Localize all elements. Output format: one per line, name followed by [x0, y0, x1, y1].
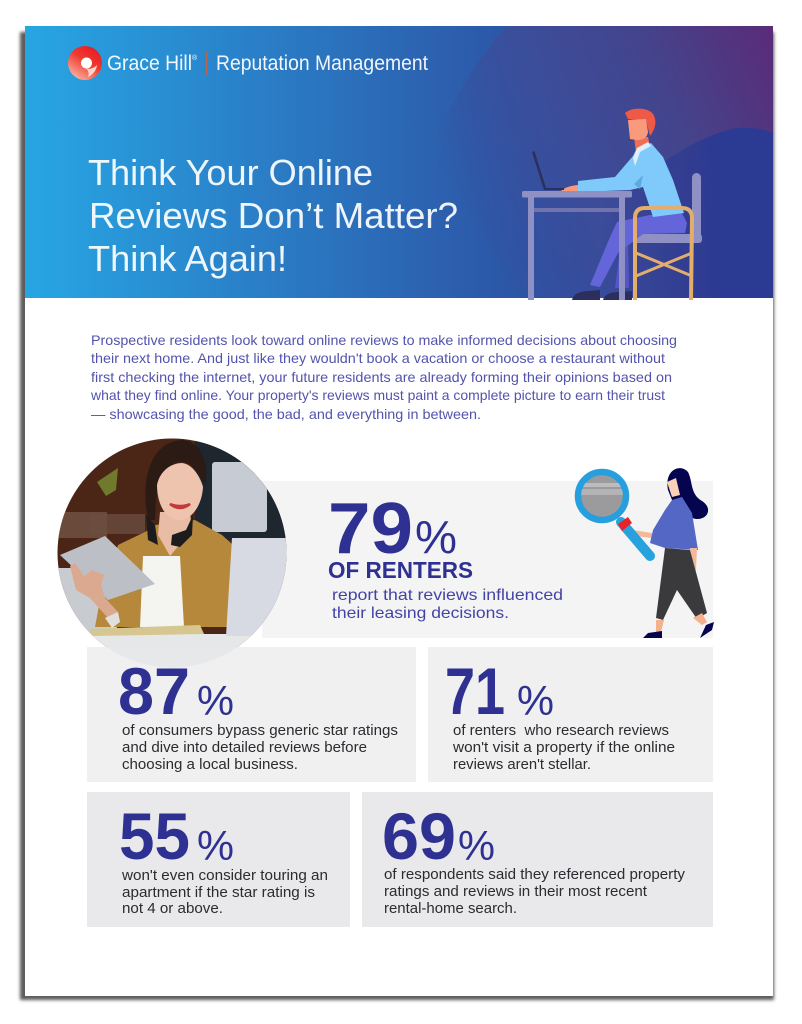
panel: 69%: %	[458, 822, 495, 869]
logo: Grace Hill	[107, 52, 192, 75]
stat: 79%	[328, 489, 473, 583]
intro paragraph: — showcasing the good, the bad, and everything in between.	[91, 407, 481, 422]
panel: 69%: rental-home search.	[384, 901, 517, 917]
intro paragraph	[90, 333, 677, 422]
panel: 55%: apartment if the star rating is	[122, 885, 315, 901]
title: Think Your Online	[88, 152, 373, 193]
stat: 79%: %	[415, 511, 457, 563]
panel: 71%: %	[517, 677, 554, 724]
title: Reviews Don’t Matter?	[89, 195, 458, 236]
stat: 79%: OF RENTERS	[328, 557, 473, 583]
logo	[68, 46, 428, 80]
logo: Reputation Management	[216, 52, 428, 75]
stat description	[332, 587, 563, 622]
panel: 55%: 55	[119, 799, 190, 873]
logo: ®	[192, 54, 198, 62]
panel: 87%	[87, 647, 416, 782]
panel: 69%	[362, 792, 713, 927]
panel: 87%: of consumers bypass generic star ratings	[122, 723, 398, 739]
panel: 87%: 87	[118, 654, 190, 728]
intro paragraph: first checking the internet, your future residents are already forming their opinions based on	[91, 370, 672, 385]
panel: 87%: %	[197, 677, 234, 724]
panel: 55%	[87, 792, 350, 927]
panel: 69%: 69	[382, 799, 456, 873]
panel: 55%: %	[197, 822, 234, 869]
panel: 71%: reviews aren't stellar.	[453, 757, 591, 773]
intro paragraph: their next home. And just like they wouldn't book a vacation or choose a restaurant without	[91, 351, 665, 366]
panel: 69%: ratings and reviews in their most recent	[384, 884, 647, 900]
title	[88, 152, 458, 279]
photo: woman with tablet	[58, 438, 286, 647]
panel: header banner	[25, 26, 773, 300]
intro paragraph: Prospective residents look toward online reviews to make informed decisions about choosing	[91, 333, 677, 348]
stat description: report that reviews influenced	[332, 587, 563, 604]
illustration: woman with magnifying glass	[578, 468, 714, 638]
intro paragraph: what they find online. Your property's reviews must paint a complete picture to earn their trust	[90, 388, 665, 403]
panel: 71%: of renters who research reviews	[453, 723, 669, 739]
panel: 55%: won't even consider touring an	[121, 868, 328, 884]
panel: 87%: and dive into detailed reviews before	[122, 740, 367, 756]
stat: 79%: 79	[328, 489, 413, 569]
stat description: their leasing decisions.	[332, 605, 509, 622]
panel: 55%: not 4 or above.	[122, 901, 223, 917]
panel: 87%: choosing a local business.	[122, 757, 298, 773]
panel: 71%: 71	[445, 654, 505, 728]
illustration: man at desk	[522, 109, 702, 300]
panel: 71%	[428, 647, 713, 782]
panel: 69%: of respondents said they referenced property	[384, 867, 686, 883]
title: Think Again!	[88, 238, 287, 279]
panel: 71%: won't visit a property if the online	[452, 740, 675, 756]
panel: 79% of renters	[262, 481, 713, 638]
